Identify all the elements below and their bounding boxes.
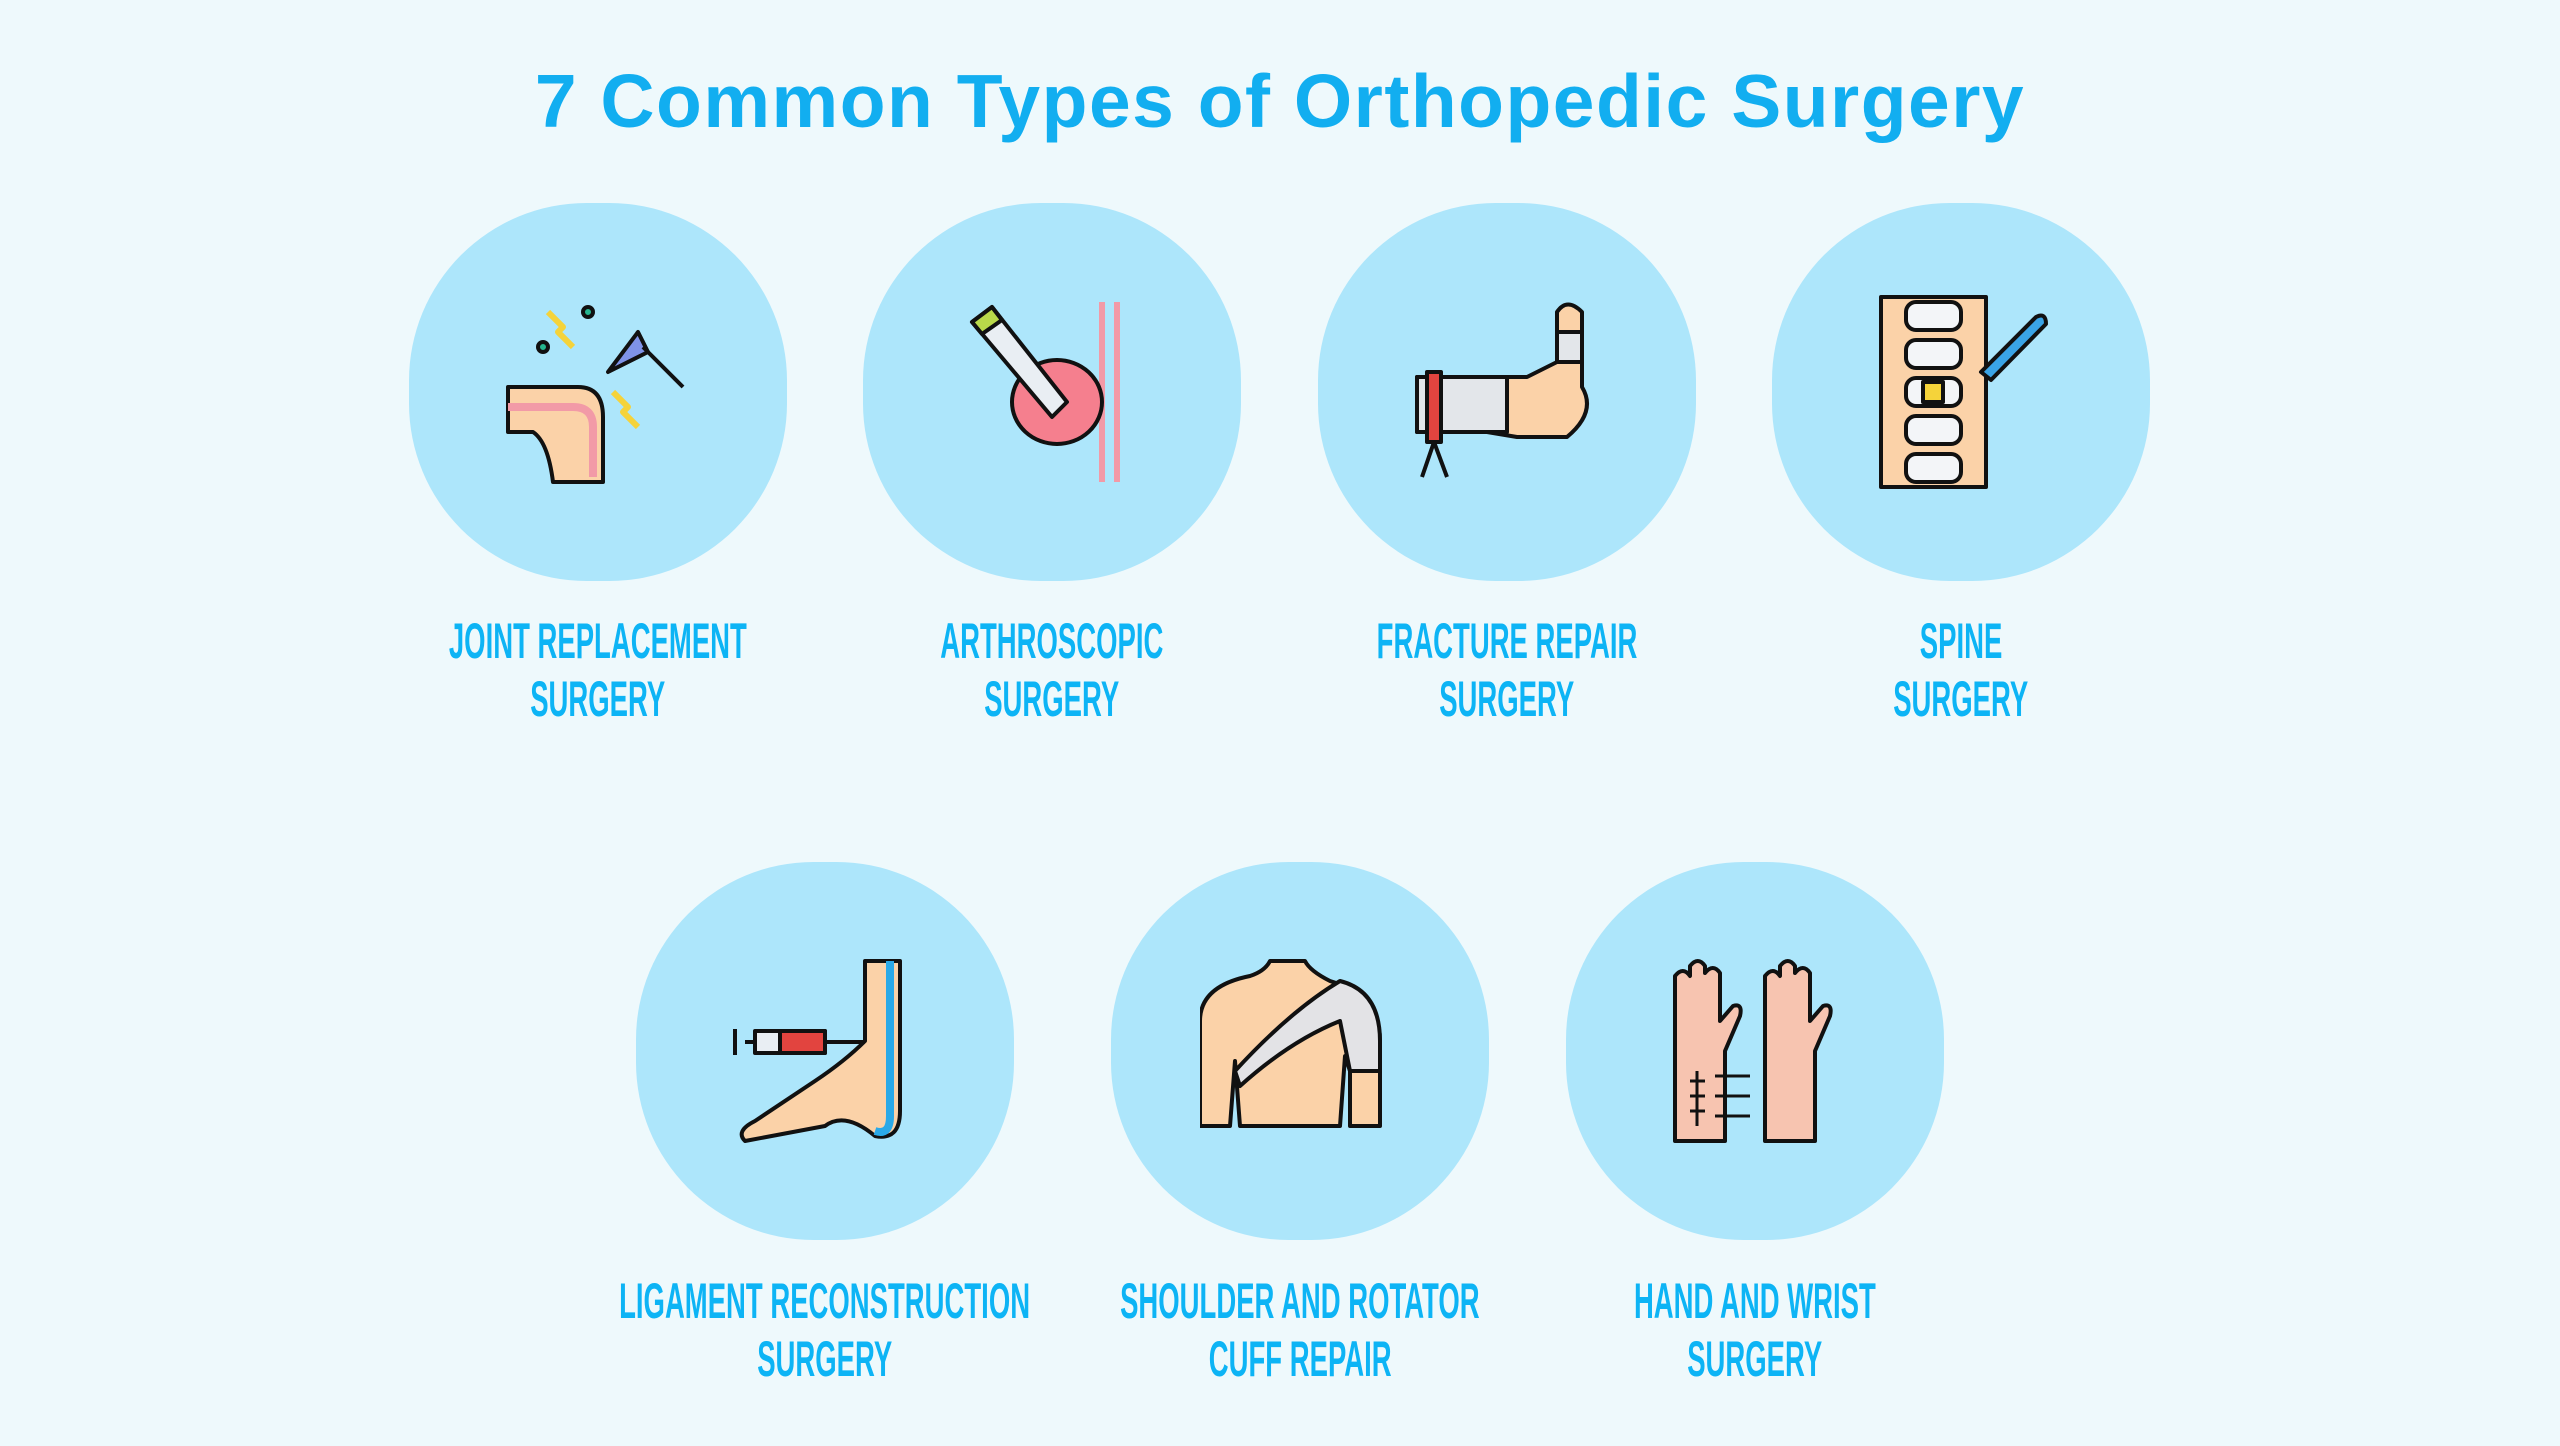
label: spine — [1894, 613, 2028, 727]
label: hand and wrist: HAND AND WRIST — [1634, 1273, 1876, 1329]
label: joint replacement: JOINT REPLACEMENT — [449, 613, 747, 669]
panel: ligament reconstruction icon circle — [636, 862, 1014, 1240]
panel: joint replacement icon circle — [409, 203, 787, 581]
label: hand and wrist: SURGERY — [1688, 1331, 1822, 1387]
panel: arthroscopic icon circle — [863, 203, 1241, 581]
label: spine: SURGERY — [1894, 671, 2028, 727]
panel: spine icon circle — [1772, 203, 2150, 581]
label: arthroscopic: ARTHROSCOPIC — [940, 613, 1164, 669]
label: shoulder: CUFF REPAIR — [1209, 1331, 1391, 1387]
label: joint replacement: SURGERY — [531, 671, 665, 727]
label: fracture repair: FRACTURE REPAIR — [1377, 613, 1637, 669]
label: spine: SPINE — [1920, 613, 2002, 669]
label: fracture repair: SURGERY — [1440, 671, 1574, 727]
panel: shoulder icon circle — [1111, 862, 1489, 1240]
label: hand and wrist — [1634, 1273, 1876, 1387]
label: ligament reconstruction: SURGERY — [758, 1331, 892, 1387]
title: 7 Common Types of Orthopedic Surgery — [535, 59, 2025, 143]
label: fracture repair — [1377, 613, 1637, 727]
label: arthroscopic: SURGERY — [985, 671, 1119, 727]
label: joint replacement — [449, 613, 747, 727]
label: ligament reconstruction: LIGAMENT RECONSTRUCTION — [620, 1273, 1030, 1329]
panel: hand and wrist icon circle — [1566, 862, 1944, 1240]
label: shoulder: SHOULDER AND ROTATOR — [1120, 1273, 1480, 1329]
label: shoulder — [1120, 1273, 1480, 1387]
panel: fracture repair icon circle — [1318, 203, 1696, 581]
label: arthroscopic — [940, 613, 1164, 727]
label: ligament reconstruction — [620, 1273, 1030, 1387]
